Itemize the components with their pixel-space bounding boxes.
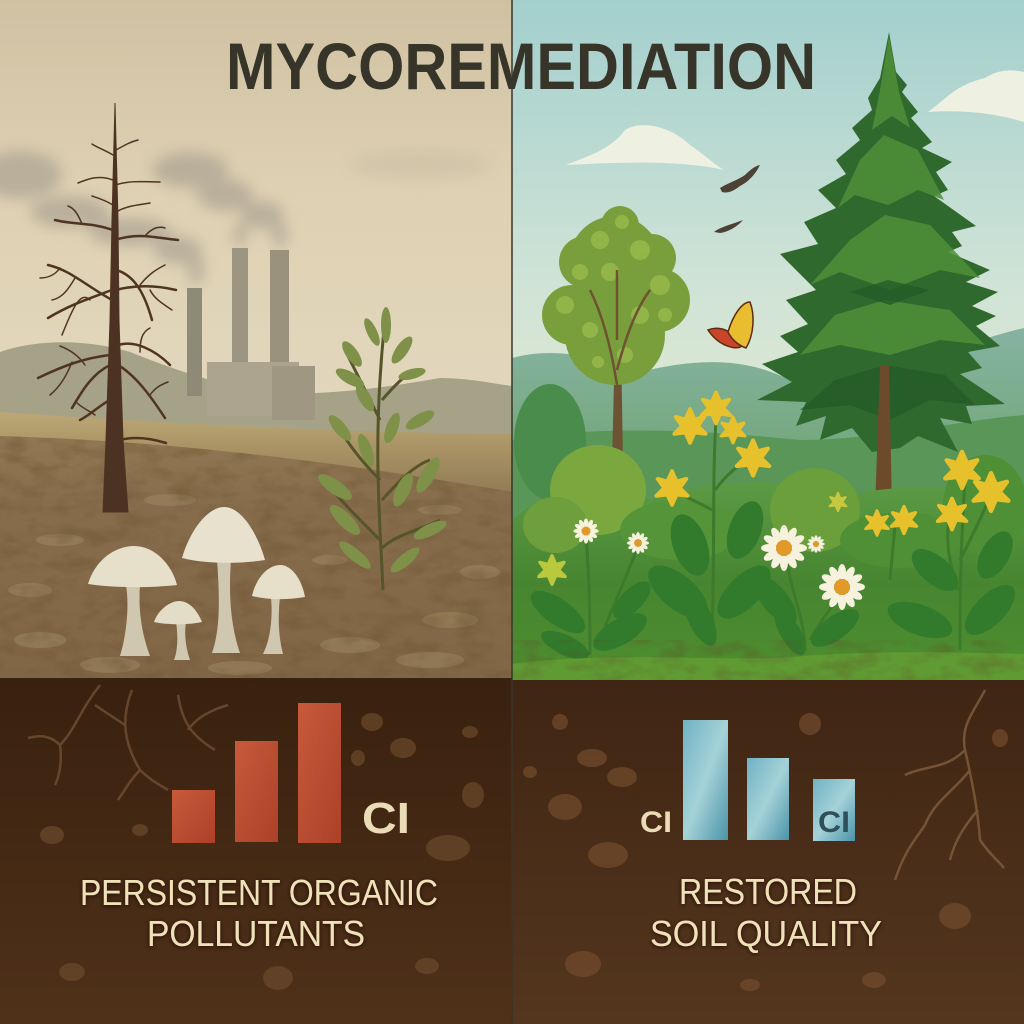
distant hills (0, 342, 512, 440)
soil stones (40, 713, 484, 990)
bar chart: restored: CI (818, 806, 850, 839)
pine tree (757, 32, 1005, 510)
label: persistent organic pollutants (80, 872, 438, 954)
green meadow (512, 482, 1024, 682)
underground soil (0, 678, 512, 1024)
label: restored soil quality (650, 871, 882, 954)
young plant (315, 307, 449, 590)
cracked ground (0, 412, 512, 682)
center divider (511, 0, 513, 1024)
clouds (566, 70, 1024, 170)
label: persistent organic pollutants: PERSISTENT ORGANIC (80, 872, 438, 913)
soil stones (523, 713, 1008, 991)
bar chart: restored (640, 720, 855, 841)
title: MYCOREMEDIATION (226, 29, 816, 103)
label: persistent organic pollutants: POLLUTANTS (147, 913, 365, 954)
mushrooms (88, 507, 305, 660)
leafy tree (542, 206, 690, 465)
roots (895, 690, 1004, 880)
bar chart: pollutants: CI (362, 794, 410, 843)
distant green hills (512, 328, 1024, 520)
butterfly (708, 302, 753, 348)
bar chart: restored: CI (640, 806, 672, 839)
panel: restored side (512, 0, 1024, 1024)
flowering plants (524, 392, 1023, 665)
factory with chimneys (187, 248, 315, 420)
polluted sky (0, 0, 512, 440)
birds (714, 165, 760, 233)
bar chart: pollutants (172, 703, 410, 843)
smoke plumes (0, 151, 490, 286)
grass strip (512, 652, 1024, 684)
underground soil (512, 680, 1024, 1024)
fungal roots (28, 685, 228, 800)
pine trunk (875, 365, 892, 510)
clear sky (512, 0, 1024, 440)
yellow flowers (539, 392, 1008, 584)
shrubs (514, 384, 1024, 568)
label: restored soil quality: RESTORED (679, 871, 857, 912)
panel: polluted side (0, 0, 512, 1024)
white daisies (573, 518, 865, 610)
label: restored soil quality: SOIL QUALITY (650, 913, 882, 954)
dead tree (38, 103, 178, 512)
